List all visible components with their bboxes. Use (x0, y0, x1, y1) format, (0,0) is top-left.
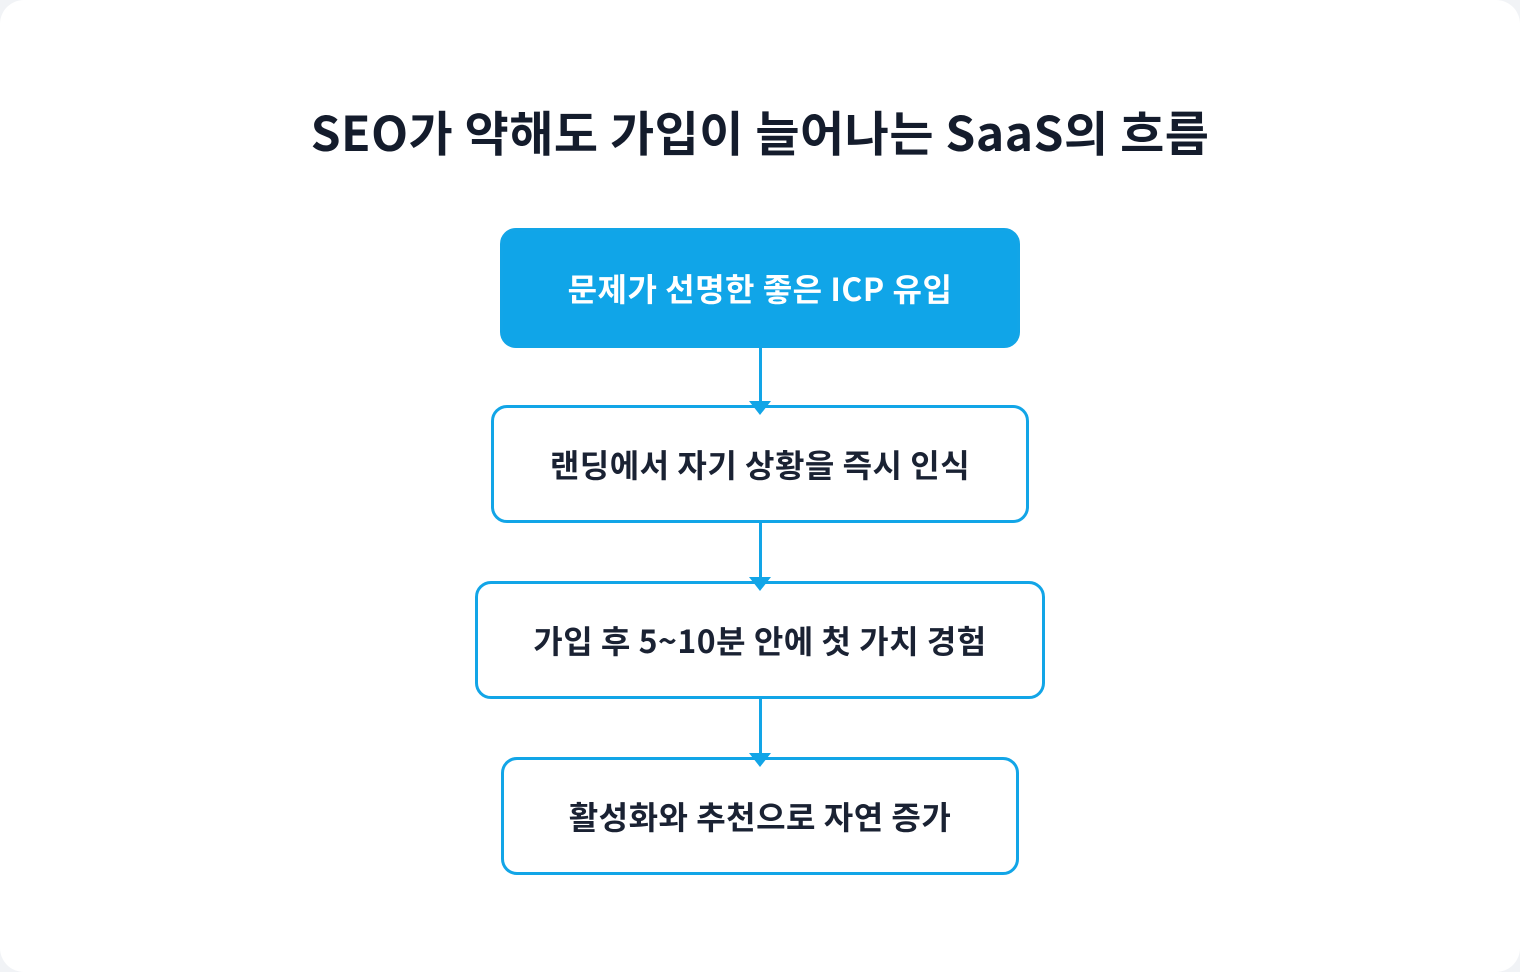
step 1 box (500, 228, 1020, 348)
title: SEO가 약해도 가입이 늘어나는 SaaS의 흐름 (311, 95, 1209, 165)
step 2 box (491, 405, 1029, 523)
step 2 box: 랜딩에서 자기 상황을 즉시 인식 (550, 441, 970, 487)
step 4 box: 활성화와 추천으로 자연 증가 (569, 793, 951, 839)
step 3 box (475, 581, 1045, 699)
arrow 3 (749, 699, 771, 767)
arrow 2 (749, 523, 771, 591)
step 4 box (501, 757, 1019, 875)
arrow 1 (749, 348, 771, 415)
step 3 box: 가입 후 5~10분 안에 첫 가치 경험 (533, 617, 987, 663)
step 1 box: 문제가 선명한 좋은 ICP 유입 (568, 265, 952, 311)
